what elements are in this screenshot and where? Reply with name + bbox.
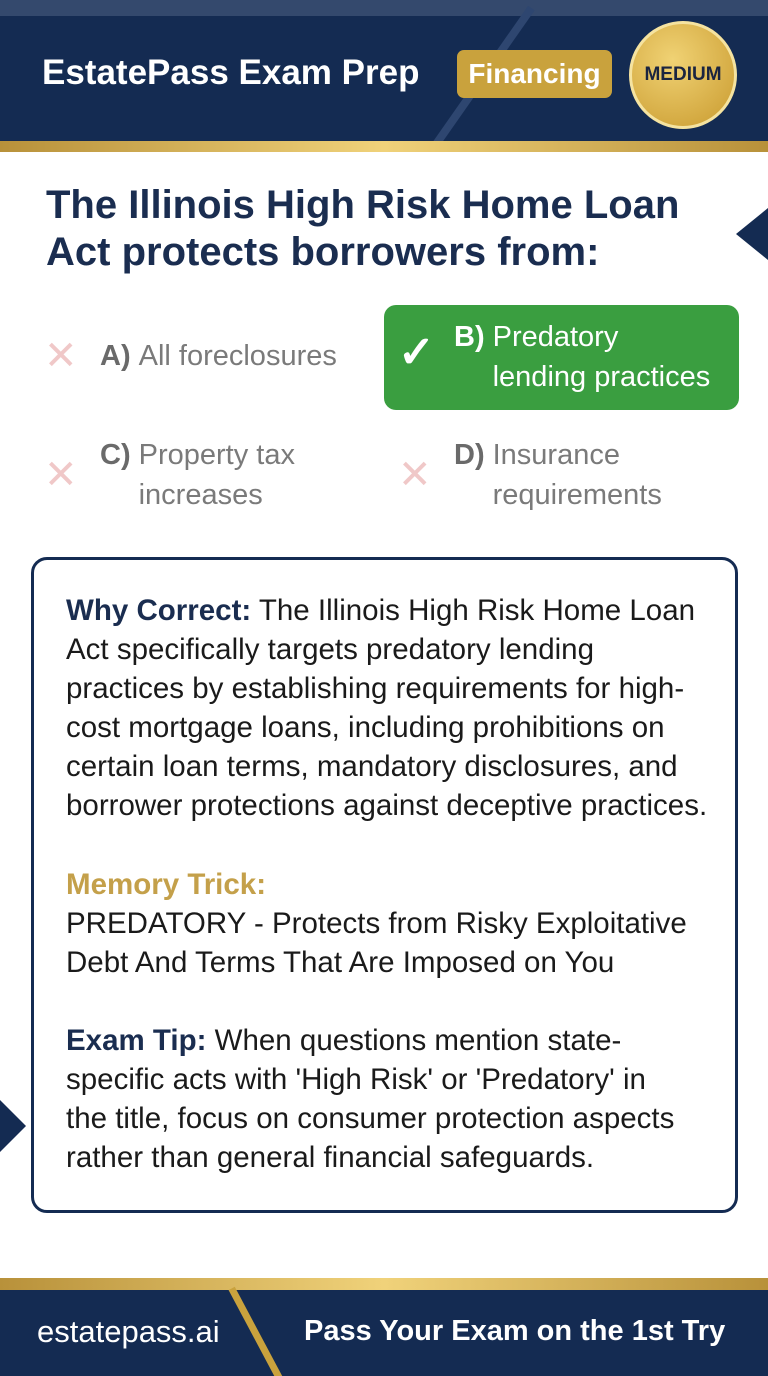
decorative right arrow — [736, 208, 768, 260]
memory trick — [66, 868, 687, 979]
exam tip: the title, focus on consumer protection aspects — [66, 1102, 674, 1135]
option A: All foreclosures — [139, 340, 337, 372]
option B correct: Predatory — [493, 321, 618, 353]
header — [0, 0, 768, 152]
why correct: Why Correct: The Illinois High Risk Home Loan — [66, 594, 695, 627]
question heading: Act protects borrowers from: — [46, 230, 599, 274]
option A: ✕ — [44, 334, 78, 378]
why correct — [66, 594, 707, 822]
memory trick: Debt And Terms That Are Imposed on You — [66, 946, 614, 979]
badge: Financing — [457, 50, 612, 98]
footer url: estatepass.ai — [37, 1314, 220, 1349]
option D: requirements — [493, 479, 662, 511]
footer — [0, 1278, 768, 1376]
option D: ✕ — [398, 453, 432, 497]
option A: A) — [100, 340, 131, 372]
why correct: cost mortgage loans, including prohibitions on — [66, 711, 665, 744]
why correct: borrower protections against deceptive practices. — [66, 789, 707, 822]
badge: Financing: Financing — [468, 58, 601, 89]
option B correct: ✓ — [398, 328, 435, 377]
title: EstatePass Exam Prep — [42, 53, 419, 92]
question heading — [46, 183, 679, 274]
exam tip: Exam Tip: When questions mention state- — [66, 1024, 621, 1057]
footer tagline: Pass Your Exam on the 1st Try — [304, 1315, 725, 1347]
why correct: practices by establishing requirements for high- — [66, 672, 684, 705]
decorative left arrow — [0, 1100, 26, 1152]
option D: Insurance — [493, 439, 620, 471]
explanation panel — [31, 557, 738, 1213]
option B correct: B) — [454, 321, 485, 353]
exam tip — [66, 1024, 674, 1174]
option D: D) — [454, 439, 485, 471]
option A — [44, 334, 337, 378]
why correct: Act specifically targets predatory lending — [66, 633, 594, 666]
memory trick: PREDATORY - Protects from Risky Exploitative — [66, 907, 687, 940]
option C: increases — [139, 479, 263, 511]
question heading: The Illinois High Risk Home Loan — [46, 183, 679, 227]
memory trick: Memory Trick: — [66, 868, 266, 901]
badge: medium — [629, 21, 737, 129]
option B correct — [384, 305, 739, 410]
option C: Property tax — [139, 439, 295, 471]
exam tip: rather than general financial safeguards. — [66, 1141, 594, 1174]
option C — [44, 439, 295, 511]
option D — [398, 439, 662, 511]
badge: medium: MEDIUM — [644, 64, 722, 85]
why correct: certain loan terms, mandatory disclosures, and — [66, 750, 678, 783]
exam tip: specific acts with 'High Risk' or 'Predatory' in — [66, 1063, 646, 1096]
option C: C) — [100, 439, 131, 471]
option B correct: lending practices — [493, 361, 710, 393]
option C: ✕ — [44, 453, 78, 497]
